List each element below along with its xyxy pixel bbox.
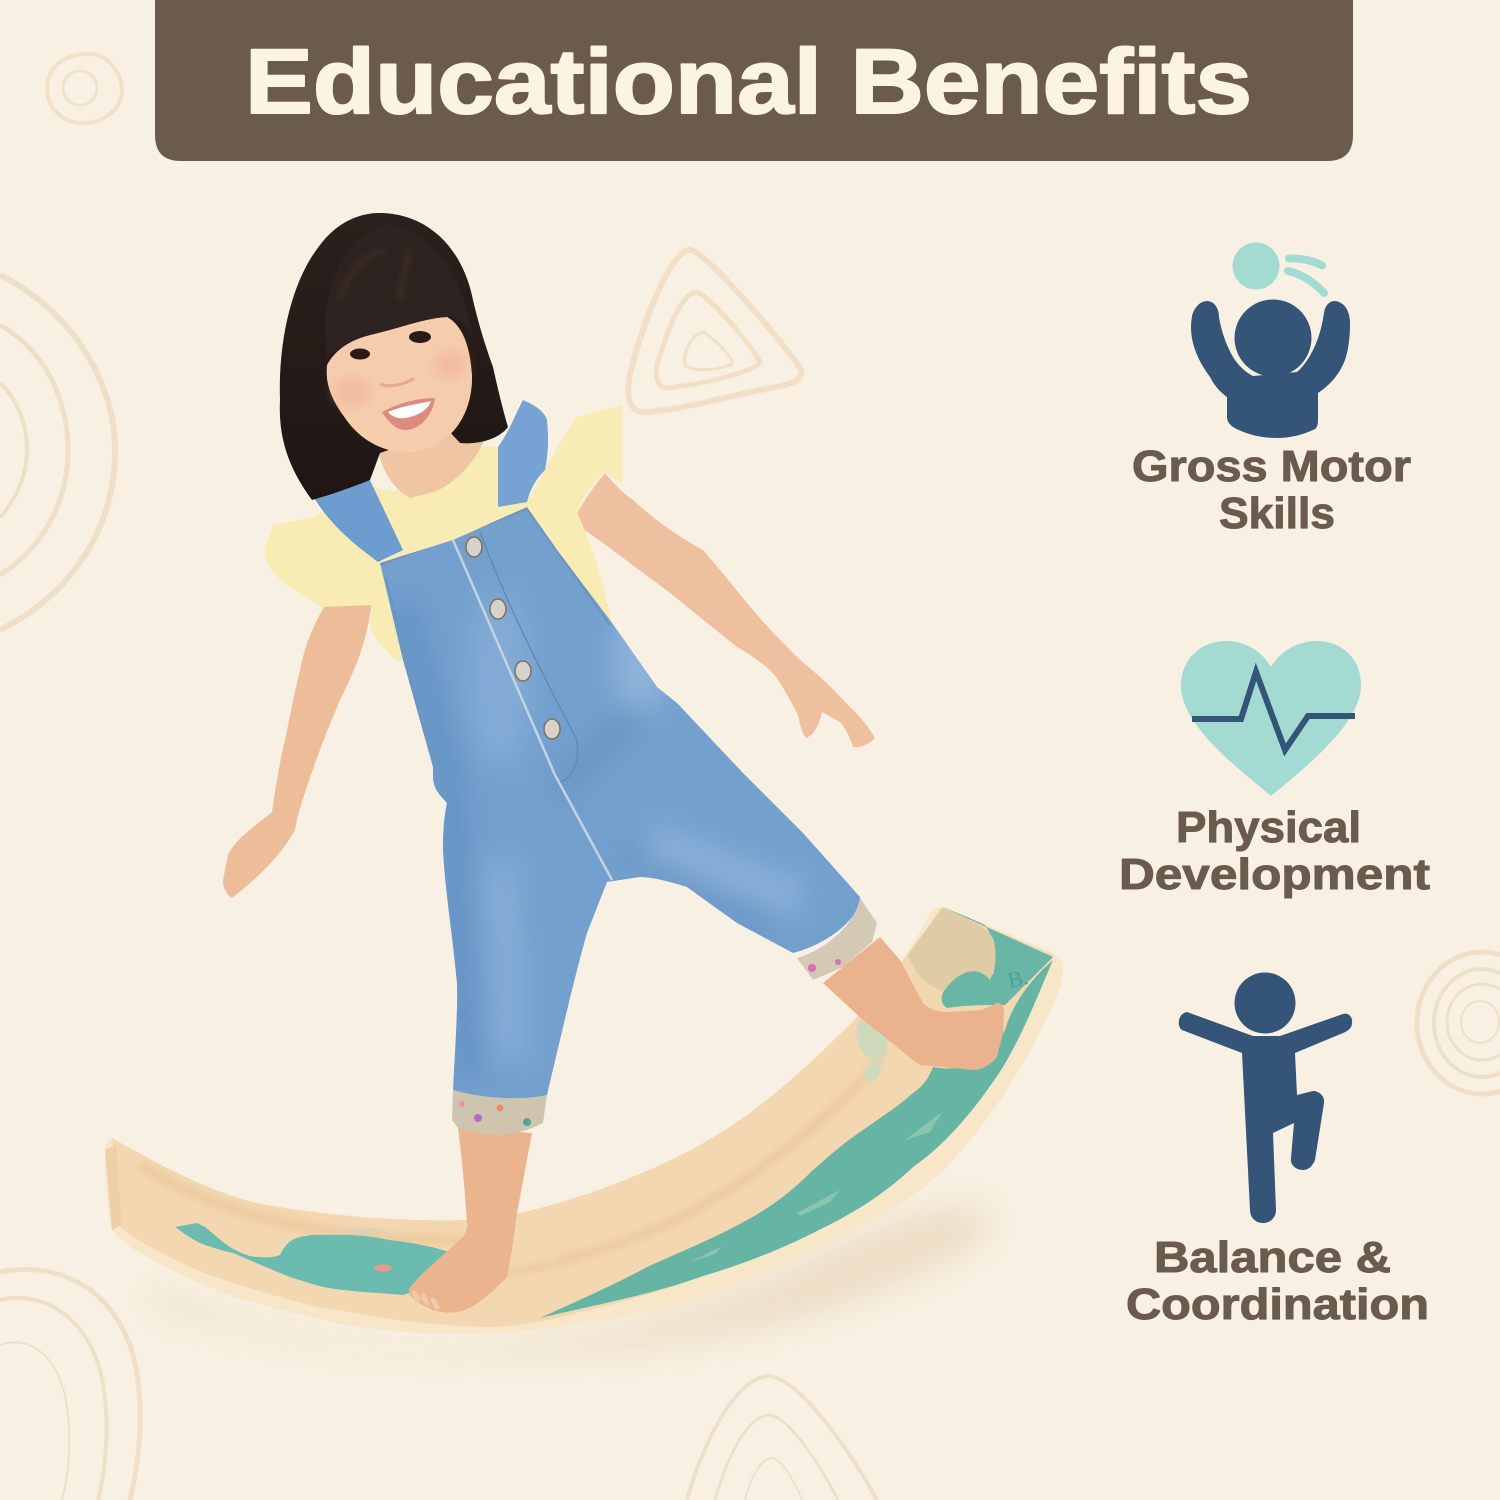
- label: gross motor: Skills: [1219, 489, 1335, 538]
- header banner: [155, 0, 1353, 161]
- wood streaks: [140, 1060, 880, 1275]
- decoration: top-left rings: [47, 54, 122, 123]
- board top wood: [908, 908, 996, 990]
- body: [1191, 301, 1350, 438]
- icon: gross motor: [1191, 242, 1350, 438]
- board shadow: [150, 1205, 990, 1356]
- body: [1179, 1012, 1352, 1223]
- board top teal: [942, 907, 1053, 1008]
- balance board: [100, 900, 1070, 1340]
- label: physical development: [1119, 803, 1430, 899]
- near leg and foot: [823, 937, 1004, 1070]
- eyes: [350, 331, 431, 360]
- buttons: [466, 537, 560, 739]
- right arm: [573, 473, 875, 747]
- title: Educational Benefits: [245, 31, 1252, 133]
- decoration: left arcs: [0, 275, 115, 630]
- floral dots: [808, 959, 841, 972]
- child: [223, 213, 1004, 1313]
- decoration: bottom-left arcs: [0, 1269, 140, 1500]
- placket stitching: [480, 532, 578, 782]
- board light patches in teal: [690, 1112, 942, 1262]
- label: balance and coordination: Balance &: [1154, 1233, 1391, 1282]
- fly seam: [453, 540, 612, 880]
- far leg and foot: [409, 1128, 532, 1313]
- board surface: [112, 907, 1053, 1327]
- shirt: [265, 405, 622, 662]
- bangs: [325, 225, 472, 358]
- teeth: [388, 401, 431, 418]
- nose: [380, 378, 414, 386]
- icon: heart: [1181, 641, 1361, 796]
- decoration: triangle spiral: [628, 250, 801, 412]
- mouth: [382, 398, 435, 430]
- label: gross motor: Gross Motor: [1132, 442, 1411, 491]
- face: [327, 317, 472, 452]
- bib stitching: [380, 509, 610, 735]
- head: [1234, 972, 1296, 1034]
- hair shine: [340, 250, 410, 300]
- whale cheek: [374, 1264, 392, 1272]
- decoration: bottom triangles: [687, 1376, 877, 1500]
- label: physical development: Physical: [1176, 803, 1361, 852]
- far foot toes: [414, 1293, 437, 1307]
- label: balance and coordination: [1126, 1233, 1429, 1329]
- decoration: right rings: [1417, 952, 1500, 1094]
- head: [1234, 300, 1312, 376]
- denim shading: [400, 590, 800, 1080]
- right strap: [498, 400, 548, 507]
- ball: [1232, 242, 1280, 290]
- hair: [280, 213, 508, 500]
- icon: balance figure: [1179, 972, 1352, 1223]
- left cuff: [452, 1090, 547, 1135]
- whale: [175, 1223, 452, 1295]
- right cuff: [797, 898, 877, 980]
- neck: [378, 430, 490, 498]
- board rim: [100, 900, 1070, 1340]
- overalls: [370, 500, 870, 1110]
- cheeks: [334, 351, 466, 406]
- small teal patches: [856, 1020, 888, 1082]
- label: balance and coordination: Coordination: [1126, 1280, 1429, 1329]
- pulse line: [1192, 672, 1355, 750]
- board teal waves: [540, 960, 1053, 1318]
- left arm: [223, 600, 372, 898]
- water spout: [340, 1228, 388, 1236]
- left end shade: [105, 1145, 122, 1230]
- label: physical development: Development: [1119, 850, 1430, 899]
- left strap: [313, 476, 403, 562]
- motion lines: [1288, 258, 1324, 293]
- logo: B.: [1005, 964, 1030, 993]
- floral dots: [459, 1101, 531, 1126]
- label: gross motor: [1132, 442, 1411, 538]
